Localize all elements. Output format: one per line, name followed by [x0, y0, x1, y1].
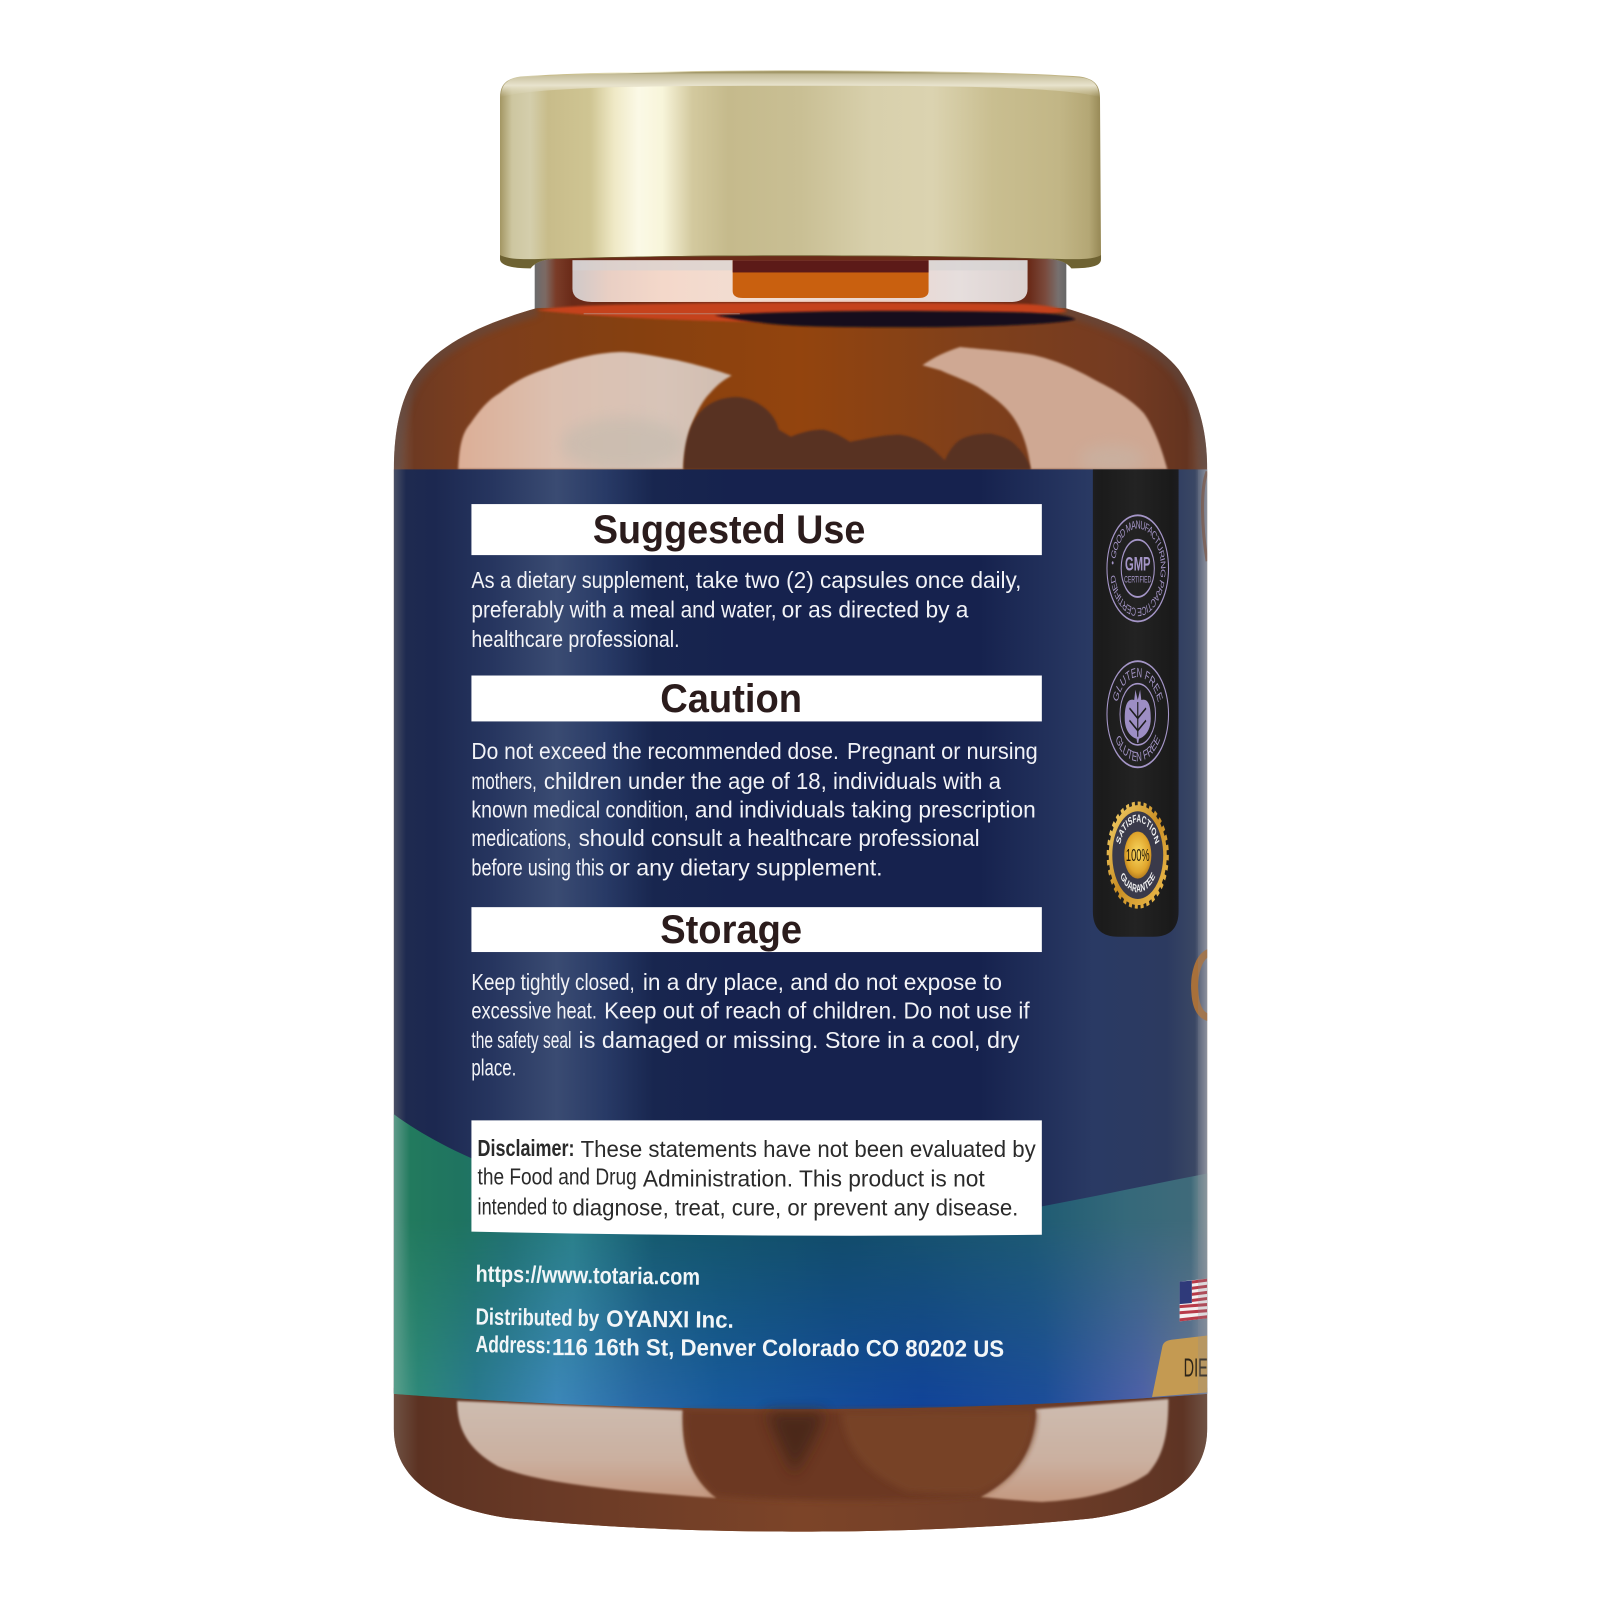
front label wrap-around elements	[1152, 470, 1208, 1397]
text block: disclaimer	[478, 1135, 1036, 1220]
text block: storage: excessive heat.	[471, 997, 597, 1023]
icon: GMP certified badge: CERTIFIED	[1124, 574, 1152, 585]
distributor address: OYANXI Inc.	[606, 1306, 734, 1333]
shoulder thin glare	[584, 313, 740, 314]
text block: caution: Pregnant or nursing	[847, 738, 1038, 764]
bottom glass highlights	[457, 1399, 1168, 1502]
heading: storage: Storage	[660, 908, 802, 952]
text block: suggested use	[471, 567, 1021, 652]
dietary supplement tag	[1152, 1336, 1208, 1397]
heading: suggested use	[471, 504, 1042, 555]
heading: suggested use: Suggested Use	[593, 508, 865, 552]
text block: caution: medications,	[471, 825, 571, 851]
icon: satisfaction guarantee seal: GUARANTEE	[1121, 872, 1156, 892]
icon: gluten free badge: GLUTEN FREE	[1116, 734, 1160, 762]
gold screw cap	[500, 70, 1101, 268]
text block: caution: known medical condition,	[471, 796, 689, 822]
heading: storage	[471, 907, 1042, 952]
capsules seen through glass, bottom	[686, 1411, 1036, 1500]
icon: satisfaction guarantee seal: 100%	[1126, 847, 1150, 866]
icon: GMP certified badge: GMP	[1125, 555, 1151, 575]
text block: disclaimer: Administration. This product is not	[643, 1166, 985, 1192]
text block: storage	[471, 969, 1030, 1081]
text block: caution: should consult a healthcare professional	[579, 825, 980, 851]
heading: caution	[471, 676, 1042, 721]
text block: caution: before using this	[471, 855, 604, 881]
text block: disclaimer: diagnose, treat, cure, or prevent any disease.	[572, 1194, 1018, 1220]
text block: disclaimer: the Food and Drug	[478, 1164, 637, 1190]
distributor address: Address:	[475, 1331, 551, 1358]
right edge shading	[1198, 469, 1207, 1393]
text block: caution: Do not exceed the recommended dose.	[471, 738, 839, 764]
highlight grey reflections	[561, 417, 1145, 473]
distributor address	[475, 1303, 1004, 1362]
text block: suggested use: take two (2) capsules once daily,	[696, 567, 1021, 593]
text block: caution: children under the age of 18, individuals with a	[544, 768, 1001, 794]
text block: suggested use: As a dietary supplement,	[471, 567, 690, 593]
distributor address: Distributed by	[475, 1303, 599, 1331]
glass rim shading	[394, 308, 1207, 469]
text block: storage: the safety seal	[471, 1027, 571, 1053]
icon: gluten free badge	[1106, 660, 1170, 768]
amber glass bottle body	[394, 308, 1207, 1532]
panel: caution	[471, 676, 1042, 881]
text block: disclaimer: intended to	[478, 1193, 567, 1219]
text block: storage: place.	[471, 1055, 516, 1081]
text block: disclaimer: Disclaimer:	[478, 1135, 574, 1161]
text block: disclaimer: These statements have not been evaluated by	[581, 1136, 1036, 1162]
panel: storage	[471, 907, 1042, 1081]
text block: suggested use: healthcare professional.	[471, 626, 680, 652]
text block: storage: Keep out of reach of children. Do not use if	[604, 997, 1030, 1023]
shoulder rim glow	[537, 302, 1067, 322]
front label	[394, 469, 1207, 1409]
heading: caution: Caution	[660, 677, 802, 721]
icon: satisfaction guarantee seal: SATISFACTION	[1116, 814, 1160, 844]
product bottle infographic	[394, 70, 1208, 1532]
text block: suggested use: or as directed by a	[782, 596, 969, 622]
black certification strip	[1092, 469, 1179, 937]
text block: suggested use: preferably with a meal and water,	[471, 596, 777, 622]
gold letter C	[1191, 949, 1208, 1021]
text block: caution: mothers,	[471, 768, 537, 794]
text block: caution: or any dietary supplement.	[609, 855, 883, 881]
top glass highlights	[458, 347, 1167, 469]
text block: storage: Keep tightly closed,	[471, 969, 635, 995]
icon: GMP certified badge: • GOOD MANUFACTURING PRACTICE CERTIFIED	[1110, 520, 1166, 616]
icon: wheat	[1125, 690, 1151, 743]
bottom glass base	[394, 1388, 1207, 1532]
text block: storage: in a dry place, and do not expose to	[643, 969, 1002, 995]
panel: disclaimer	[471, 1120, 1042, 1236]
shoulder dark band	[714, 311, 1076, 327]
brand letter arc, top right	[1203, 471, 1207, 561]
dietary supplement tag: DIETARY	[1184, 1355, 1245, 1383]
bottle neck	[535, 255, 1066, 316]
text block: caution: and individuals taking prescription	[695, 796, 1036, 822]
website url: https://www.totaria.com	[475, 1261, 700, 1290]
icon: satisfaction guarantee seal	[1106, 802, 1169, 909]
panel: suggested use	[471, 504, 1042, 652]
text block: caution	[471, 738, 1038, 881]
icon: gluten free badge: GLUTEN FREE	[1113, 668, 1163, 702]
text block: storage: is damaged or missing. Store in a cool, dry	[579, 1027, 1020, 1053]
icon: US flag	[1180, 1279, 1207, 1321]
distributor address: 116 16th St, Denver Colorado CO 80202 US	[552, 1334, 1004, 1362]
capsules seen through glass, top	[684, 397, 1031, 469]
